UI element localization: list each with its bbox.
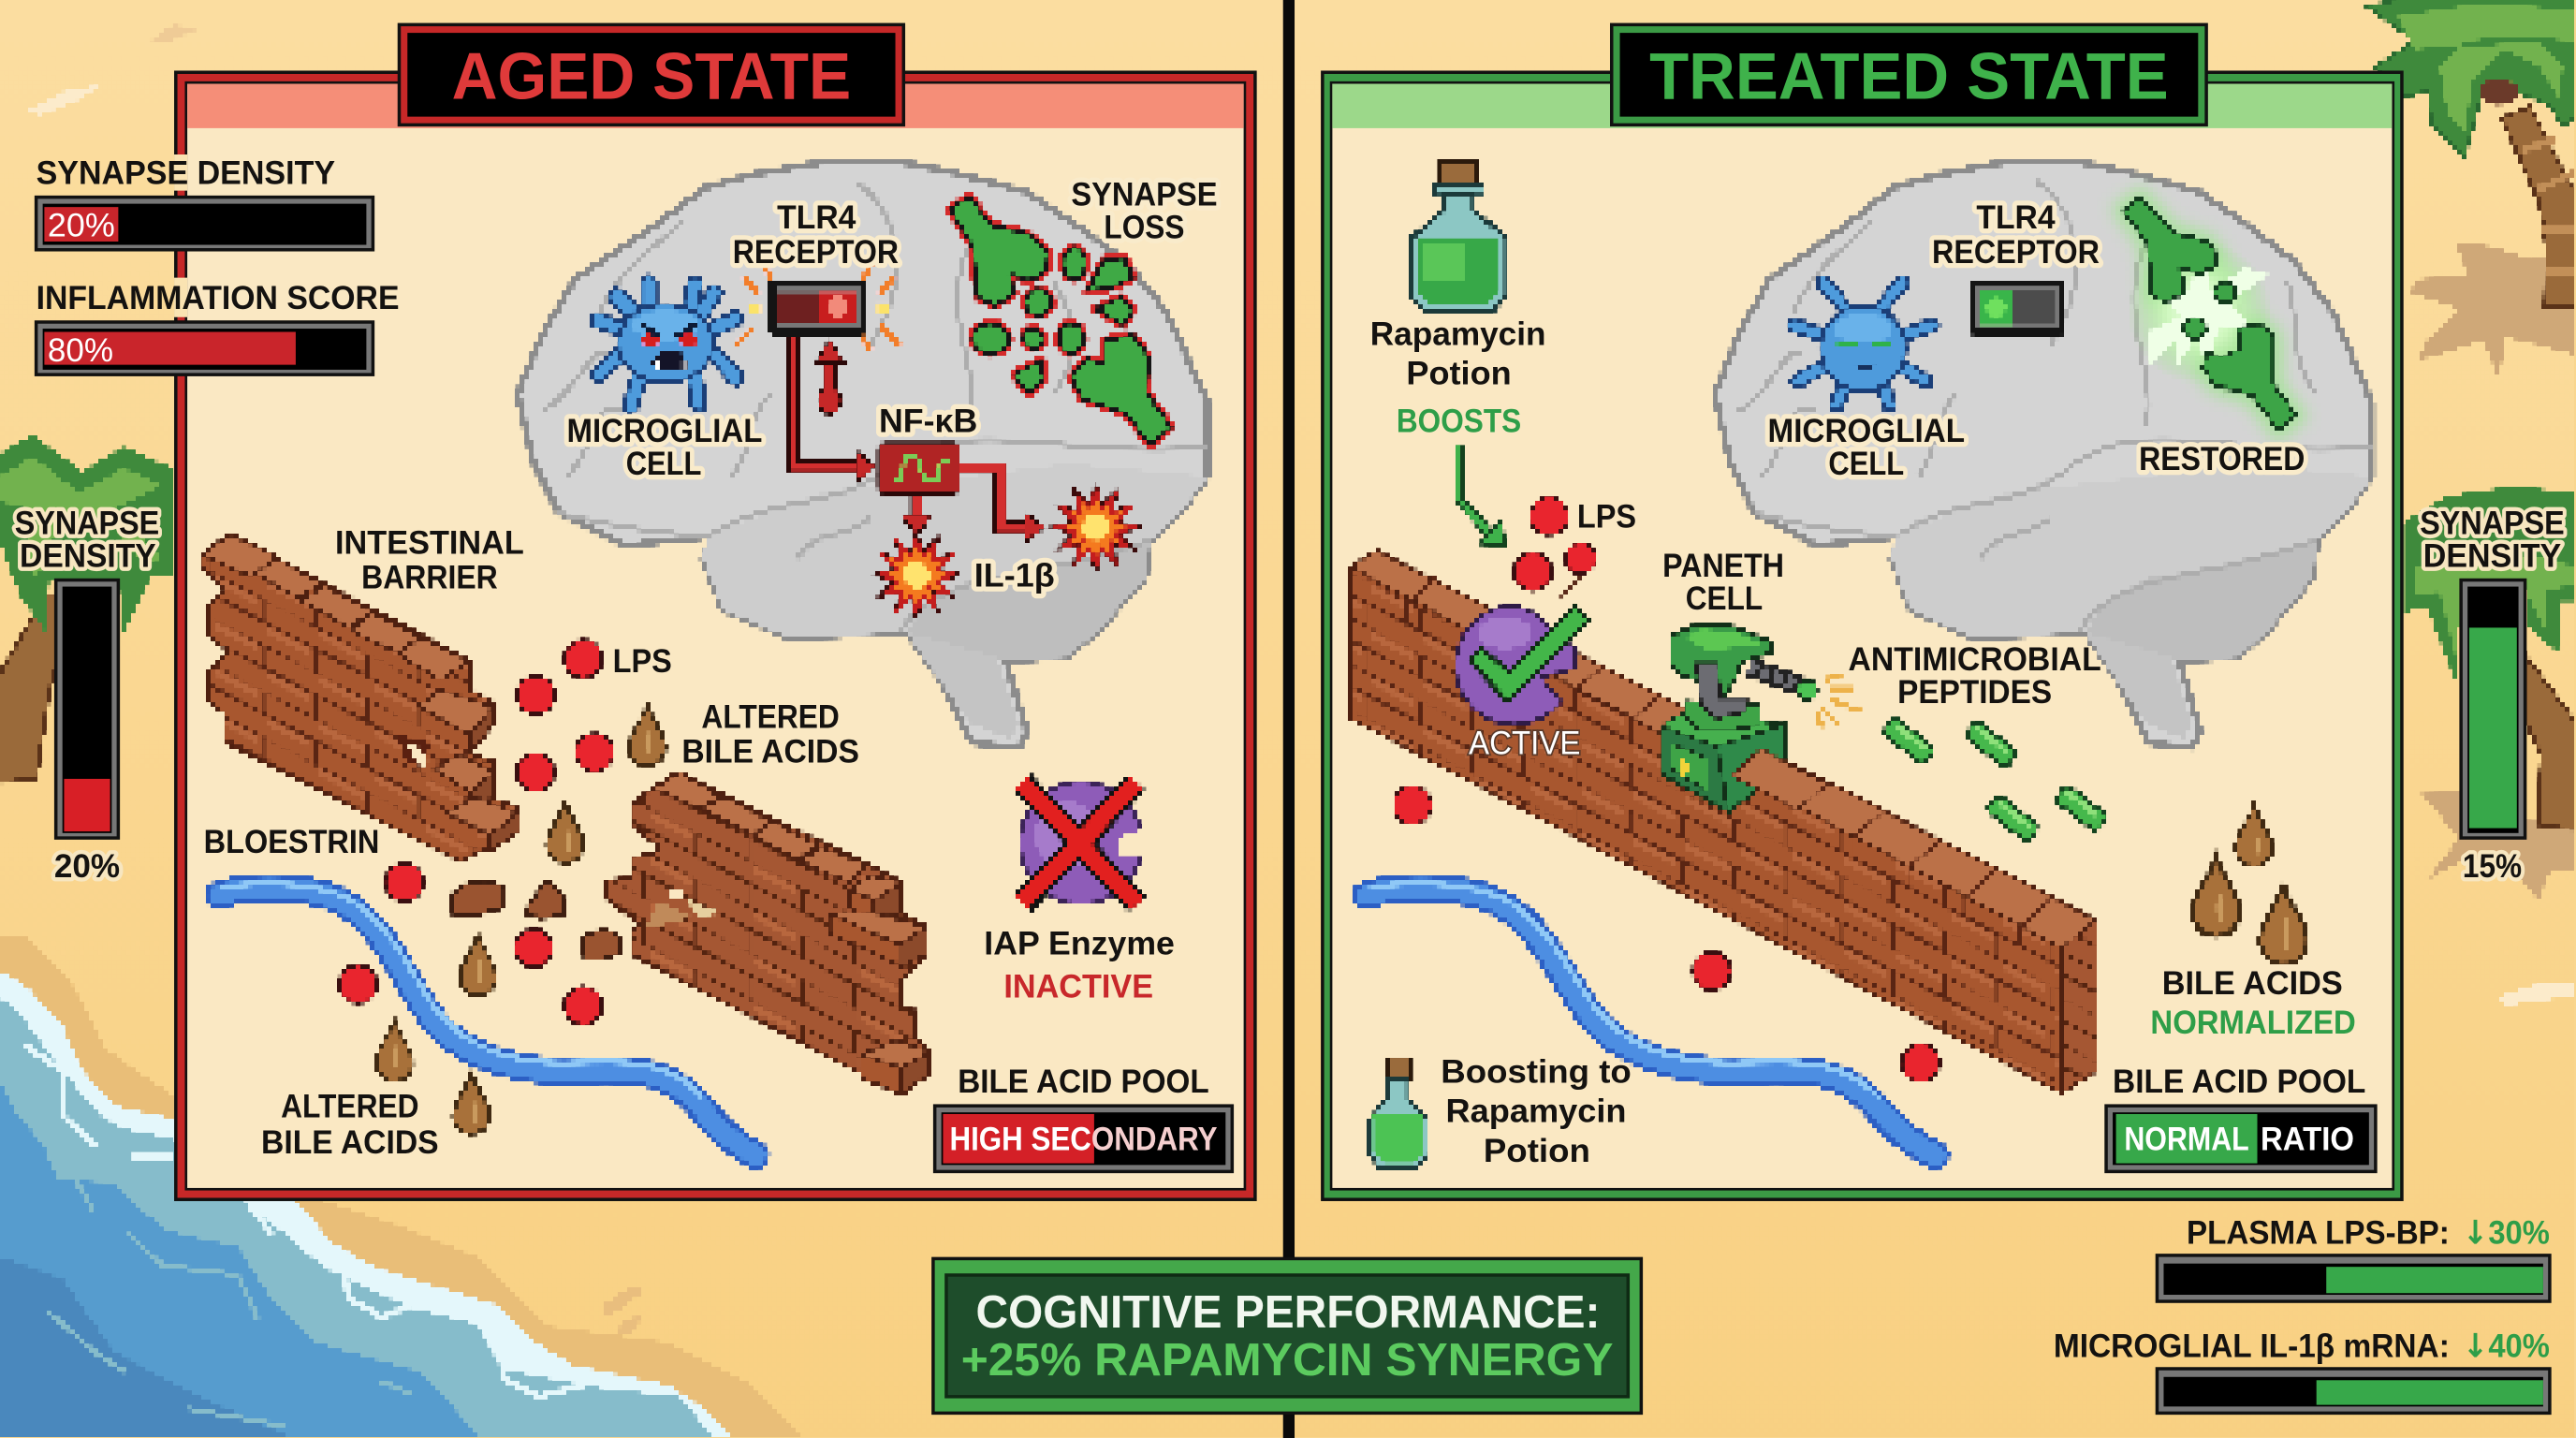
- central divider: [1283, 0, 1295, 1438]
- intestinal barrier: intact wall: [1351, 550, 2097, 1093]
- label: antimicrobial peptides: [1848, 641, 2101, 711]
- palm trunk: lower right: [2526, 657, 2576, 829]
- paneth cell turret: [1661, 624, 1817, 812]
- label: intestinal barrier: [335, 524, 524, 595]
- label: IL-1 beta: IL-1β: [974, 558, 1055, 594]
- decorative palm trees on the beach: [0, 0, 2576, 901]
- panel: aged state: [174, 23, 1257, 1201]
- HUD gauge: inflammation score: INFLAMMATION SCORE: [37, 280, 399, 316]
- bile acid pool gauge: normal ratio: BILE ACID POOL: [2113, 1064, 2365, 1100]
- label: altered bile acids, upper: BILE ACIDS: [681, 733, 859, 770]
- rapamycin potion: large: [1412, 163, 1506, 312]
- palm trunk: top right: [2502, 107, 2576, 307]
- intestinal barrier: broken lower wall: [607, 772, 929, 1094]
- wall cap in front of the turret: [1732, 749, 1827, 810]
- label: microglial cell: [1767, 413, 1965, 482]
- title plate: aged state: AGED STATE: [452, 38, 851, 112]
- title plate: treated state: [1610, 23, 2208, 126]
- altered bile acid droplets: [376, 705, 666, 1134]
- label: rapamycin potion: [1370, 316, 1546, 392]
- label: altered bile acids, lower: BILE ACIDS: [261, 1124, 439, 1161]
- gap in panel border behind the gauge headings: [174, 154, 187, 317]
- TLR4 switch: off: [1969, 281, 2065, 335]
- label: IAP enzyme inactive: [984, 926, 1175, 1005]
- vertical gauge: synapse density aged 20%: DENSITY: [20, 538, 156, 575]
- label: microglial cell: CELL: [1828, 446, 1904, 482]
- double arrow: [815, 340, 844, 414]
- label: restored: RESTORED: [2139, 441, 2305, 477]
- label: boosting to rapamycin potion: Potion: [1484, 1133, 1590, 1169]
- illustrations: treated state: [1351, 161, 2372, 1168]
- gauge: plasma LPS-BP down 30%: PLASMA LPS-BP:: [2187, 1215, 2450, 1252]
- signal pathway arrows: [794, 335, 1045, 542]
- banner: cognitive performance: COGNITIVE PERFORMANCE:: [976, 1287, 1600, 1338]
- gauge: microglial IL-1 beta mRNA down 40%: MICROGLIAL IL-1β mRNA:: [2054, 1328, 2450, 1365]
- bile acid pool gauge: high secondary: HIGH SECONDARY: [949, 1122, 1218, 1158]
- bile acid pool gauge: normal ratio: RATIO: [2261, 1122, 2354, 1158]
- antimicrobial peptides: [1882, 717, 2108, 843]
- restored synapse: [2123, 198, 2297, 431]
- label: IAP enzyme inactive: IAP Enzyme: [984, 926, 1175, 962]
- palm trunk: left: [0, 594, 79, 782]
- label: synapse loss: SYNAPSE: [1071, 176, 1218, 213]
- label: rapamycin potion: Rapamycin: [1370, 316, 1546, 353]
- microglial cell: calm: [1794, 283, 1932, 404]
- label: LPS: LPS: [1577, 498, 1636, 535]
- label: altered bile acids, upper: [681, 699, 859, 770]
- label: intestinal barrier: INTESTINAL: [335, 524, 524, 561]
- vertical gauge: synapse density treated 15%: 15%: [2463, 848, 2522, 885]
- label: antimicrobial peptides: ANTIMICROBIAL: [1848, 641, 2101, 678]
- vertical gauge: synapse density aged 20%: 20%: [54, 848, 120, 885]
- label: bile acids normalized: NORMALIZED: [2150, 1005, 2356, 1041]
- bloodstream river: [218, 884, 755, 1155]
- label: intestinal barrier: BARRIER: [361, 559, 498, 595]
- gauge: microglial IL-1 beta mRNA down 40%: ↓40%: [2463, 1328, 2550, 1366]
- brick rubble: [450, 881, 620, 960]
- label: IAP enzyme inactive: INACTIVE: [1003, 968, 1153, 1005]
- IL-1 beta burst: left: [871, 529, 962, 621]
- label: microglial cell: MICROGLIAL: [567, 413, 762, 449]
- label: TLR4 receptor: TLR4: [777, 199, 856, 236]
- palm crown: lower right: [2404, 487, 2576, 682]
- HUD gauge: synapse density: [35, 155, 374, 252]
- bile acid pool gauge: high secondary: [933, 1064, 1234, 1173]
- label: TLR4 receptor: TLR4: [1976, 199, 2056, 236]
- palm shadow: lower right: [2422, 792, 2576, 901]
- label: boosts: BOOSTS: [1397, 404, 1521, 440]
- HUD gauge: synapse density: SYNAPSE DENSITY: [37, 155, 335, 192]
- gauge: plasma LPS-BP down 30%: ↓30%: [2463, 1214, 2550, 1253]
- vertical gauge: synapse density aged 20%: [15, 505, 159, 885]
- glow around restored synapse: [2123, 198, 2297, 431]
- label: paneth cell: PANETH: [1662, 548, 1784, 584]
- label: altered bile acids, lower: ALTERED: [281, 1088, 419, 1124]
- panel: treated state: [1321, 23, 2404, 1201]
- IAP enzyme: inactive: [1020, 782, 1147, 903]
- label: microglial cell: MICROGLIAL: [1767, 413, 1965, 449]
- label: bile acids normalized: [2150, 965, 2356, 1041]
- vertical gauge: synapse density treated 15%: DENSITY: [2423, 538, 2561, 575]
- IAP enzyme: active with check: [1456, 607, 1588, 725]
- label: microglial cell: CELL: [626, 446, 701, 482]
- illustrations: aged state: [202, 161, 1208, 1155]
- bile acid droplets: normalized: [2193, 805, 2307, 964]
- label: microglial cell: [567, 413, 762, 482]
- HUD gauge: inflammation score: 80%: [48, 332, 113, 369]
- synapse loss: fragmented synapse: [949, 198, 1171, 446]
- vertical gauge: synapse density aged 20%: SYNAPSE: [15, 505, 159, 541]
- title plate: treated state: TREATED STATE: [1649, 38, 2169, 112]
- palm shadow: top right: [2411, 242, 2576, 379]
- panel frame: [174, 70, 1257, 1201]
- label: altered bile acids, upper: ALTERED: [701, 699, 840, 736]
- brain: treated: [1715, 161, 2372, 748]
- label: paneth cell: CELL: [1686, 580, 1763, 617]
- TLR4 switch: on, sparking: [736, 263, 900, 350]
- LPS particles: [1394, 497, 1939, 1082]
- label: boosting to rapamycin potion: Rapamycin: [1445, 1093, 1627, 1130]
- label: antimicrobial peptides: PEPTIDES: [1897, 674, 2052, 711]
- vertical gauge: synapse density treated 15%: [2420, 505, 2565, 885]
- boost arrow: [1459, 447, 1505, 546]
- bile acid pool gauge: normal ratio: NORMAL: [2124, 1122, 2249, 1158]
- gauge: plasma LPS-BP down 30%: [2156, 1214, 2552, 1303]
- rapamycin potion: small: [1368, 1058, 1427, 1168]
- gauge: microglial IL-1 beta mRNA down 40%: [2054, 1328, 2552, 1415]
- vertical gauge: synapse density treated 15%: SYNAPSE: [2420, 505, 2565, 541]
- label: synapse loss: [1071, 176, 1218, 245]
- IL-1 beta burst: right: [1050, 481, 1142, 574]
- panel frame: [1321, 70, 2404, 1201]
- HUD gauge: inflammation score: [35, 280, 399, 376]
- bloodstream river: [1367, 884, 1935, 1155]
- microglial cell: angry: [598, 283, 736, 406]
- label: bloodstream: BLOESTRIN: [204, 824, 379, 860]
- muzzle sparks: [1817, 674, 1860, 728]
- palm crown: left: [0, 435, 172, 633]
- banner: cognitive performance: [931, 1257, 1643, 1415]
- label: synapse loss: LOSS: [1104, 209, 1184, 245]
- intestinal barrier: broken upper wall: [202, 534, 520, 861]
- label: NF-kB: NF-κB: [879, 404, 977, 440]
- bile acid pool gauge: high secondary: BILE ACID POOL: [958, 1064, 1209, 1100]
- label: boosting to rapamycin potion: Boosting to: [1441, 1054, 1632, 1091]
- NF-kB box: [879, 444, 959, 493]
- label: TLR4 receptor: [1932, 199, 2100, 271]
- label: rapamycin potion: Potion: [1406, 356, 1512, 392]
- label: paneth cell: [1662, 548, 1784, 617]
- bile acid pool gauge: normal ratio: [2104, 1064, 2378, 1173]
- label: TLR4 receptor: [733, 199, 899, 271]
- title plate: aged state: [398, 23, 905, 126]
- label: active: ACTIVE: [1469, 726, 1580, 762]
- LPS particles: [339, 640, 614, 1024]
- banner: cognitive performance: +25% RAPAMYCIN SYNERGY: [961, 1335, 1614, 1386]
- label: bile acids normalized: BILE ACIDS: [2162, 965, 2343, 1002]
- brain: aged: [518, 161, 1208, 748]
- palm crown: top right: [2367, 0, 2576, 157]
- label: LPS: LPS: [613, 643, 672, 680]
- label: TLR4 receptor: RECEPTOR: [733, 234, 899, 271]
- label: boosting to rapamycin potion: [1441, 1054, 1632, 1169]
- label: altered bile acids, lower: [261, 1088, 439, 1161]
- label: TLR4 receptor: RECEPTOR: [1932, 234, 2100, 271]
- HUD gauge: synapse density: 20%: [48, 208, 115, 244]
